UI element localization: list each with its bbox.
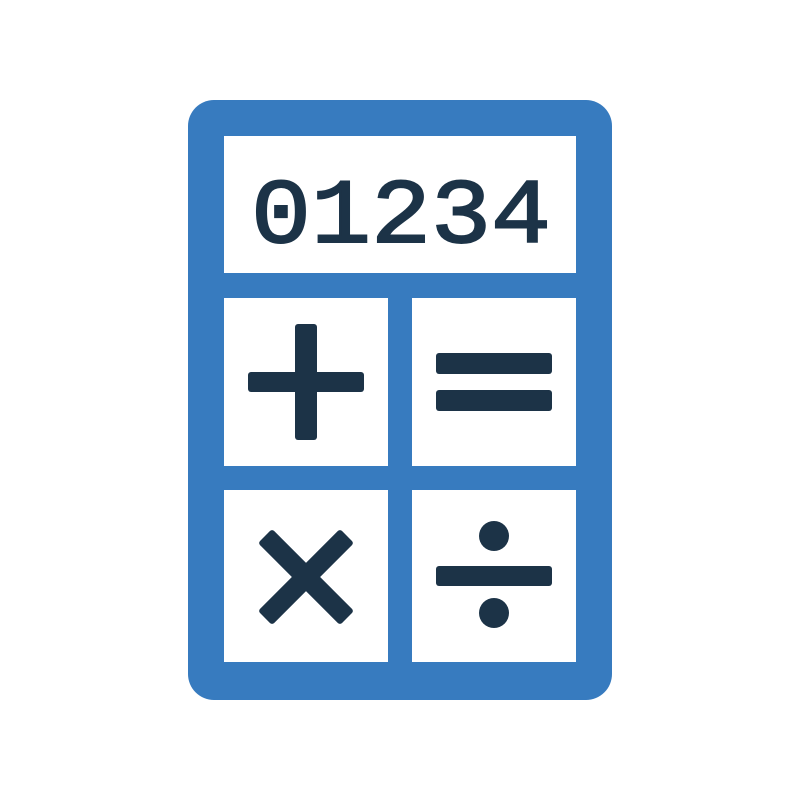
button: multiply [224, 490, 388, 662]
button: equals [412, 298, 576, 466]
button: plus [224, 298, 388, 466]
display digits: 01234 [251, 165, 551, 270]
calculator body [188, 100, 612, 700]
display panel [224, 136, 576, 273]
button: divide [412, 490, 576, 662]
